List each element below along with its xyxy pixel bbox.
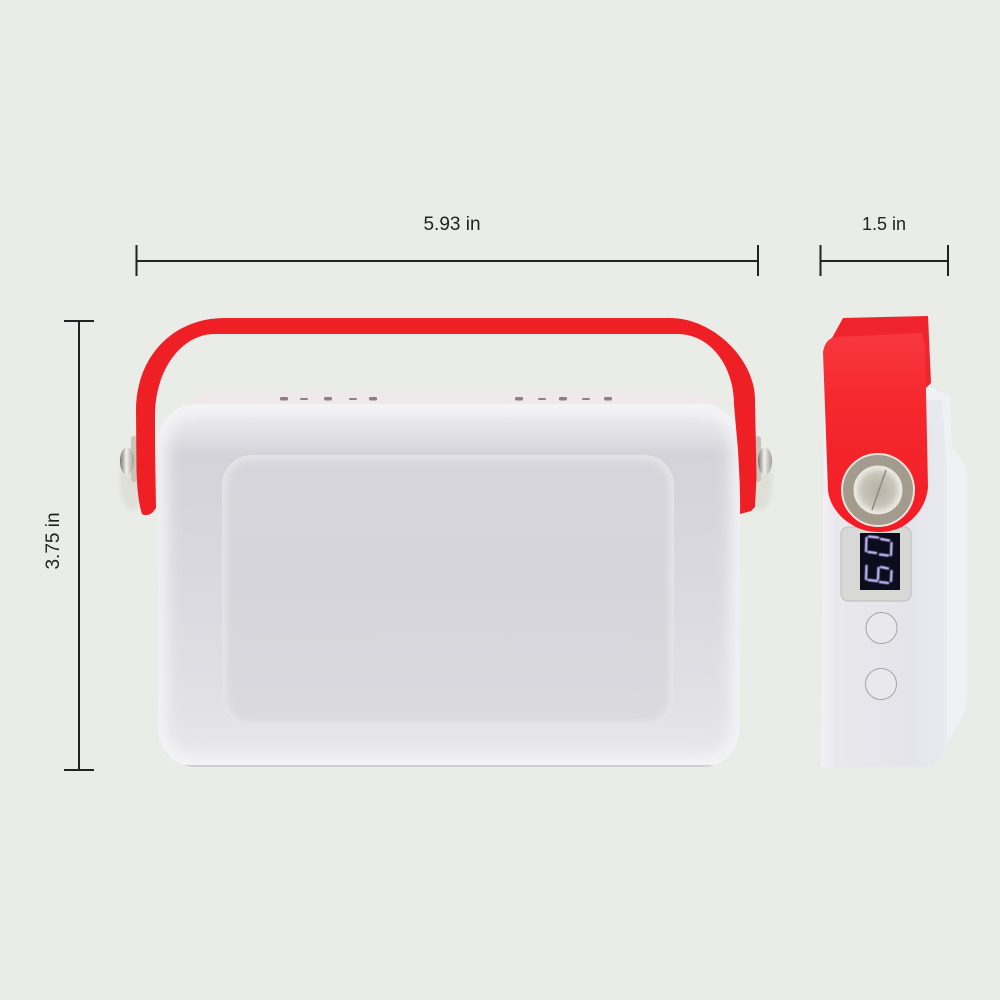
right bolt xyxy=(748,436,772,510)
rear top edge with vents xyxy=(186,392,720,404)
product side view xyxy=(821,316,967,767)
product front view xyxy=(120,318,772,768)
width dimension: 5.93 in: 5.93 in xyxy=(423,214,481,235)
display bezel xyxy=(841,527,911,601)
depth dimension: 1.5 in xyxy=(820,214,948,276)
metal bolt xyxy=(842,454,914,526)
button upper xyxy=(866,612,897,644)
left bolt xyxy=(120,436,144,510)
red handle xyxy=(136,318,756,515)
red strap xyxy=(823,333,928,532)
strap tip over bezel xyxy=(846,518,912,532)
rear housing xyxy=(900,384,967,766)
height dimension: 3.75 in: 3.75 in xyxy=(43,512,64,570)
button lower xyxy=(866,668,896,700)
digital display xyxy=(860,533,900,590)
side body xyxy=(821,400,947,767)
depth dimension: 1.5 in: 1.5 in xyxy=(862,214,906,234)
main body xyxy=(150,404,750,768)
red strap rear tab xyxy=(832,316,931,388)
recessed front panel xyxy=(222,455,674,727)
